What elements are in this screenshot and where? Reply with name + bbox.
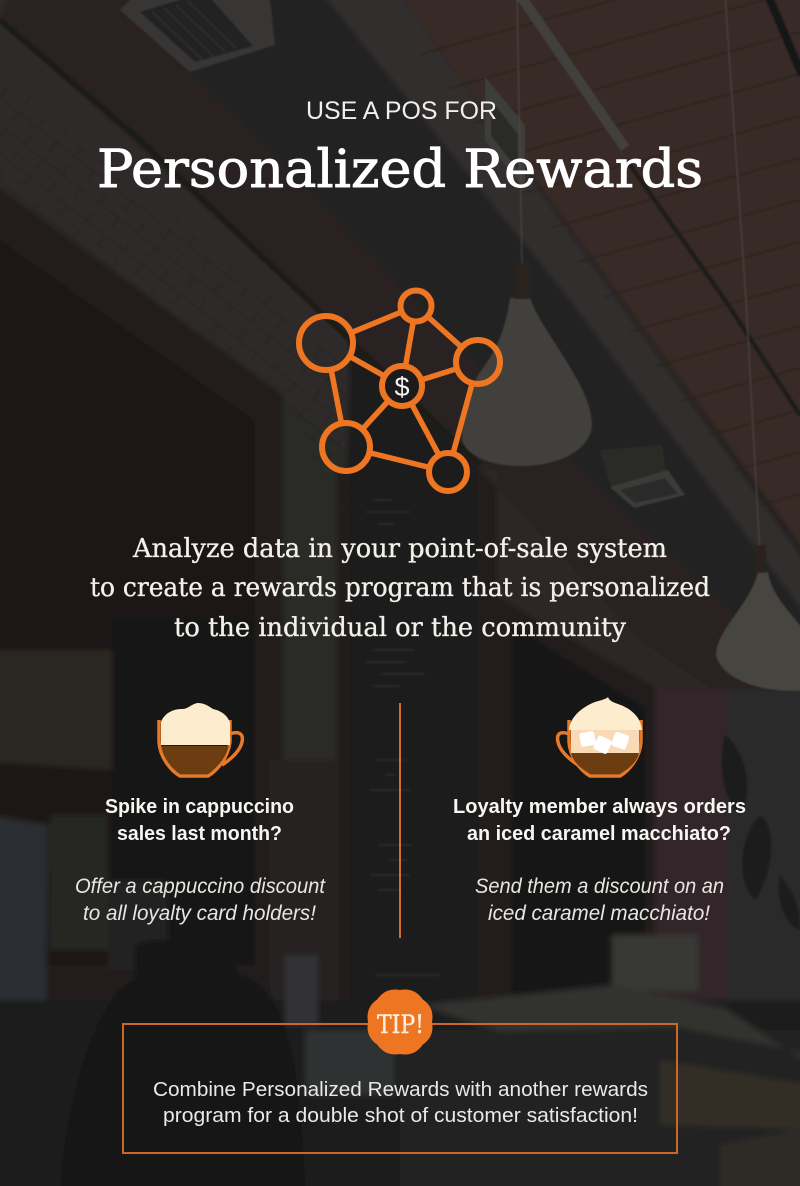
person [60, 939, 305, 1186]
box on counter [612, 935, 698, 991]
pendant lamp right [716, 572, 800, 691]
soffit [190, 0, 800, 740]
tip callout box [123, 1024, 677, 1153]
pipe [0, 20, 480, 465]
tip text: Combine Personalized Rewards with another rewards [153, 1078, 648, 1101]
brick texture [0, 40, 350, 520]
left posters [0, 810, 48, 1060]
white conduit [520, 0, 625, 148]
pendant lamp left [462, 298, 592, 466]
right heading: Loyalty member always orders [453, 795, 746, 818]
left heading: sales last month? [117, 822, 282, 845]
left offer text [75, 875, 326, 925]
tip badge [368, 990, 432, 1054]
tip badge: TIP! [377, 1010, 424, 1039]
icon: cappuccino cup [159, 703, 242, 776]
wall above door [0, 0, 350, 520]
lower area [0, 1000, 800, 1186]
reddish brick band [0, 0, 800, 760]
right offer text: Send them a discount on an [475, 875, 724, 898]
right heading [453, 795, 746, 845]
center divider [399, 703, 401, 938]
plant leaves [722, 735, 800, 930]
right brick [655, 690, 727, 1010]
wood planks [422, 0, 799, 506]
left offer text: Offer a cappuccino discount [75, 875, 326, 898]
right offer text [475, 875, 724, 925]
top vent [120, 0, 275, 72]
icon: dollar sign: $ [394, 372, 410, 402]
title: Personalized Rewards: Personalized Rewards [97, 140, 703, 200]
left heading [105, 795, 294, 845]
right heading: an iced caramel macchiato? [467, 822, 731, 845]
left heading: Spike in cappuccino [105, 795, 294, 818]
intro paragraph: to the individual or the community [174, 612, 626, 643]
intro paragraph: to create a rewards program that is personalized [90, 572, 710, 603]
beam vent [485, 77, 525, 190]
lower beam vent [600, 445, 668, 490]
intro paragraph [90, 533, 710, 643]
tip text [153, 1078, 648, 1127]
tip text: program for a double shot of customer satisfaction! [163, 1104, 638, 1127]
left offer text: to all loyalty card holders! [83, 902, 316, 925]
right door [497, 596, 655, 1010]
icon: customer network with dollar hub [299, 290, 500, 491]
long beam [295, 0, 800, 660]
middle brick wall [480, 470, 800, 1010]
right offer text: iced caramel macchiato! [488, 902, 710, 925]
chalkboard [337, 470, 497, 1010]
left door [0, 160, 283, 1010]
brick pillar [283, 395, 345, 1010]
subtitle: USE A POS FOR: USE A POS FOR [306, 97, 497, 125]
wood ceiling [375, 0, 800, 600]
icon: iced caramel macchiato cup [558, 697, 642, 776]
chalk writing [366, 500, 440, 975]
intro paragraph: Analyze data in your point-of-sale system [132, 533, 667, 564]
